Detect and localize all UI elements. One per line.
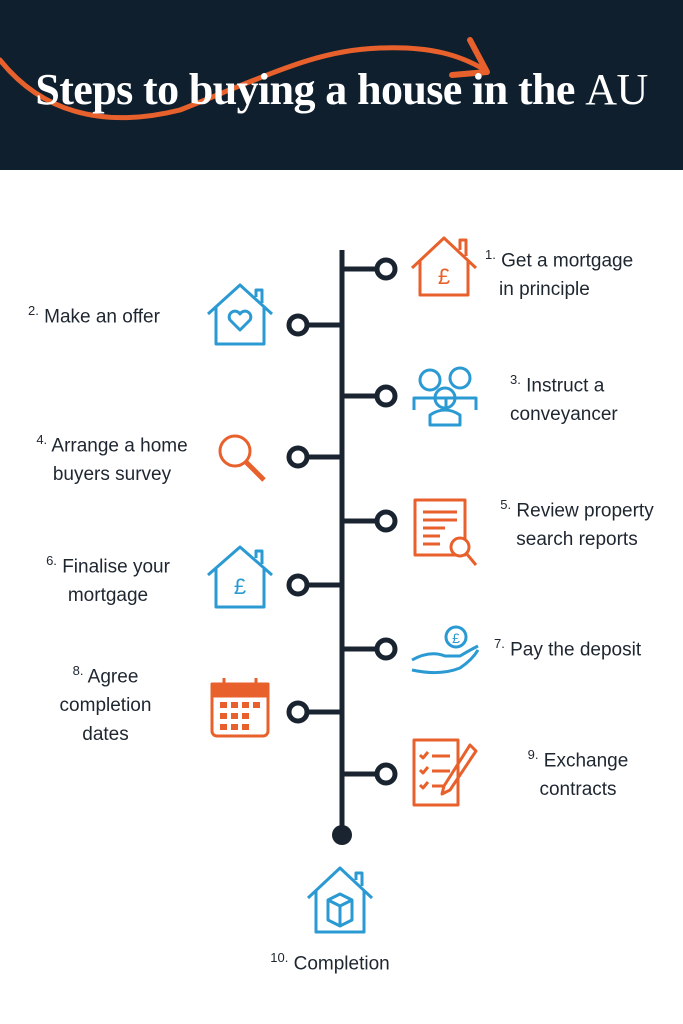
icon: hand coin: £ [452,630,460,646]
step 3 [510,372,618,425]
step 8: 8. Agree [73,663,138,687]
step 9 [528,747,628,800]
step 8 [60,663,151,745]
header banner [0,0,683,170]
icon: hand coin [412,627,478,673]
step 10: 10. Completion [270,950,390,974]
icon: people [414,368,476,425]
icon: house pound 1: £ [438,264,450,289]
arrow swoosh [0,37,490,120]
icon: calendar [212,678,268,736]
step 8: completion [60,695,151,716]
step 6 [46,553,170,606]
step 9: contracts [539,779,617,800]
step 8: dates [82,724,129,745]
icon: report [415,500,476,565]
step 4: 4. Arrange a home [36,432,188,456]
step 3: conveyancer [510,404,618,425]
step 2: 2. Make an offer [28,303,160,327]
step 1: in principle [499,279,590,300]
icon: contract [414,740,476,805]
step 9: 9. Exchange [528,747,628,771]
step 5: search reports [516,529,638,550]
icon: house pound 1 [412,238,476,295]
step 5 [500,497,654,550]
icon: magnifier [220,436,264,480]
step 6: mortgage [68,585,148,606]
step 4 [36,432,188,485]
step 4: buyers survey [53,464,171,485]
icon: house pound 6: £ [234,574,246,599]
step 1: 1. Get a mortgage [485,247,633,271]
step 5: 5. Review property [500,497,654,521]
icon: house pound 6 [208,547,272,607]
icon: house box [308,868,372,932]
icon: house heart [208,285,272,344]
step 3: 3. Instruct a [510,372,604,396]
title: Steps to buying a house in the AU [35,65,648,114]
step 6: 6. Finalise your [46,553,170,577]
step 7: 7. Pay the deposit [494,636,641,660]
step 1 [485,247,633,300]
